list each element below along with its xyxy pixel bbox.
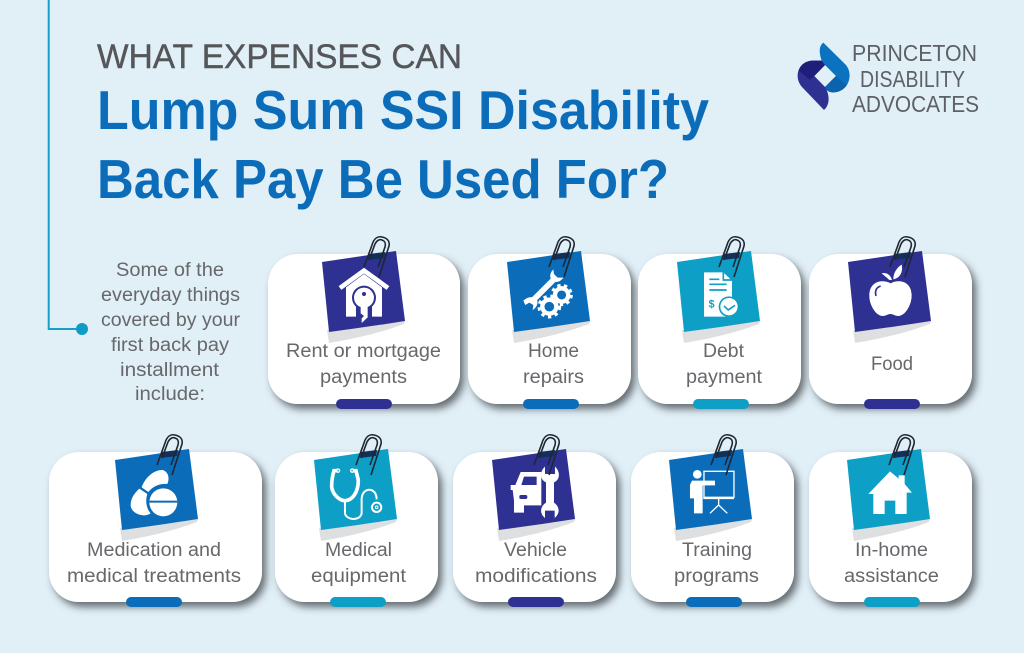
label: Rent or mortgage <box>286 341 441 362</box>
icon: pills <box>131 470 179 518</box>
paperclip <box>889 435 914 475</box>
paperclip <box>364 237 389 277</box>
label <box>844 540 939 587</box>
card: vehicle modifications <box>453 435 616 607</box>
note <box>492 449 575 541</box>
label: payments <box>320 367 407 388</box>
logo wordmark: DISABILITY <box>860 66 965 92</box>
pill <box>864 399 920 409</box>
pill <box>330 597 386 607</box>
icon: wrench and gears <box>523 269 571 317</box>
pill <box>686 597 742 607</box>
icon: house <box>868 471 912 514</box>
label: equipment <box>311 566 407 587</box>
icon: house with key <box>340 271 388 323</box>
icon: trainer with board <box>690 470 734 513</box>
label <box>311 540 407 587</box>
intro text: covered by your <box>101 310 241 331</box>
title <box>97 38 709 210</box>
label <box>286 341 441 388</box>
card: debt payment <box>638 237 801 409</box>
label <box>686 341 763 388</box>
note <box>677 251 760 343</box>
card: in-home assistance <box>809 435 972 607</box>
card: home repairs <box>468 237 631 409</box>
icon: car and wrench <box>511 467 559 518</box>
pill <box>126 597 182 607</box>
label: repairs <box>523 367 584 388</box>
note <box>669 449 752 541</box>
intro text: installment <box>120 360 220 381</box>
note <box>322 251 405 343</box>
connector line with dot <box>49 0 88 335</box>
paperclip <box>157 435 182 475</box>
card: medical equipment <box>275 435 438 607</box>
note <box>507 251 590 343</box>
logo wordmark: PRINCETON <box>852 40 977 66</box>
icon: stethoscope <box>332 469 381 519</box>
intro text: Some of the <box>116 260 224 281</box>
intro text: first back pay <box>111 335 230 356</box>
label: payment <box>686 367 763 388</box>
note <box>848 251 931 343</box>
pill <box>693 399 749 409</box>
paperclip <box>711 435 736 475</box>
pill <box>523 399 579 409</box>
card: food <box>809 237 972 409</box>
pill <box>864 597 920 607</box>
label: Medical <box>325 540 392 561</box>
label: Home <box>528 341 579 362</box>
icon: apple <box>869 265 912 316</box>
label: Medication and <box>87 540 221 561</box>
logo wordmark: ADVOCATES <box>852 91 979 117</box>
label: Debt <box>703 341 745 362</box>
label: medical treatments <box>67 566 241 587</box>
note <box>115 449 198 541</box>
title kicker: WHAT EXPENSES CAN <box>97 38 462 76</box>
label: assistance <box>844 566 939 587</box>
label: In-home <box>855 540 928 561</box>
intro text <box>101 260 241 405</box>
logo <box>798 40 979 117</box>
label <box>67 540 241 587</box>
logo mark <box>798 43 850 110</box>
paperclip <box>549 237 574 277</box>
card: training programs <box>631 435 794 607</box>
label: Vehicle <box>504 540 567 561</box>
logo wordmark <box>852 40 979 117</box>
card: rent or mortgage payments <box>268 237 460 409</box>
label <box>674 540 759 587</box>
icon: bill with check: $ <box>709 298 715 310</box>
label: modifications <box>475 566 597 587</box>
paperclip <box>890 237 915 277</box>
label: programs <box>674 566 759 587</box>
label <box>523 341 584 388</box>
card: medication and medical treatments <box>49 435 262 607</box>
title line 1: Lump Sum SSI Disability <box>97 79 709 141</box>
title line 2: Back Pay Be Used For? <box>97 148 669 210</box>
intro text: include: <box>135 384 205 405</box>
note <box>847 449 930 541</box>
paperclip <box>719 237 744 277</box>
icon: bill with check <box>704 272 739 317</box>
label: Food <box>871 354 913 375</box>
paperclip <box>534 435 559 475</box>
note <box>314 449 397 541</box>
pill <box>336 399 392 409</box>
intro text: everyday things <box>101 285 240 306</box>
label: Training <box>682 540 752 561</box>
label <box>475 540 597 587</box>
paperclip <box>356 435 381 475</box>
pill <box>508 597 564 607</box>
